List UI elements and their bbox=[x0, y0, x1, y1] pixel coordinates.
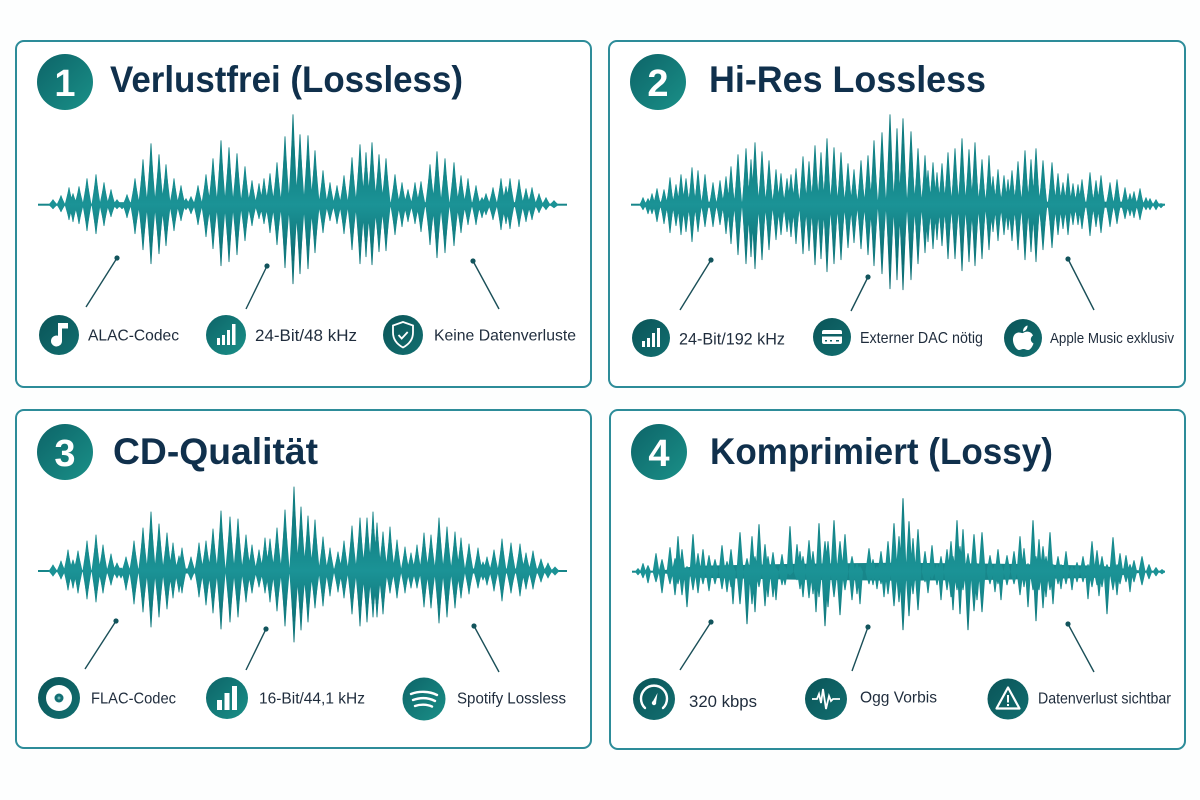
waveform 3 bbox=[38, 487, 567, 642]
icon: disc bbox=[38, 677, 80, 719]
label: Keine Datenverluste: Keine Datenverluste bbox=[434, 328, 576, 344]
panel: Verlustfrei (Lossless) bbox=[16, 41, 591, 387]
label: 16-Bit/44,1 kHz: 16-Bit/44,1 kHz bbox=[259, 690, 365, 708]
callout leader: Ogg Vorbis bbox=[852, 624, 871, 671]
label: Externer DAC nötig: Externer DAC nötig bbox=[860, 330, 983, 347]
label: 320 kbps: 320 kbps bbox=[689, 692, 757, 711]
callout leader: 16-Bit/44,1 kHz bbox=[246, 626, 269, 670]
number badge 1 bbox=[37, 54, 93, 110]
heading 3: CD-Qualität bbox=[113, 431, 318, 472]
waveform 1 bbox=[38, 115, 567, 284]
callout leader: Apple Music bbox=[1065, 256, 1094, 310]
number badge 3: 3 bbox=[54, 433, 76, 475]
icon: music note bbox=[39, 315, 79, 355]
icon: external DAC bbox=[813, 318, 851, 356]
label: 24-Bit/48 kHz: 24-Bit/48 kHz bbox=[255, 326, 357, 345]
panel: Komprimiert (Lossy) bbox=[610, 410, 1185, 749]
icon: warning triangle bbox=[988, 678, 1028, 720]
number badge 1: 1 bbox=[54, 63, 76, 105]
number badge 2: 2 bbox=[647, 63, 669, 105]
number badge 4: 4 bbox=[648, 433, 670, 475]
label: Spotify Lossless: Spotify Lossless bbox=[457, 690, 566, 708]
label: ALAC-Codec: ALAC-Codec bbox=[88, 328, 179, 344]
icon: signal bars bbox=[206, 677, 248, 719]
panel: Hi-Res Lossless bbox=[609, 41, 1185, 387]
heading 4: Komprimiert (Lossy) bbox=[710, 431, 1053, 472]
icon: shield check bbox=[383, 315, 423, 355]
heading 2: Hi-Res Lossless bbox=[709, 59, 986, 100]
icon: apple bbox=[1004, 319, 1042, 357]
number badge 2 bbox=[630, 54, 686, 110]
card frame 3 bbox=[16, 410, 591, 748]
icon: signal bars bbox=[206, 315, 246, 355]
icon: spotify waves bbox=[402, 678, 446, 720]
panel: CD-Qualität bbox=[16, 410, 591, 748]
label: Datenverlust sichtbar: Datenverlust sichtbar bbox=[1038, 690, 1172, 708]
heading 1: Verlustfrei (Lossless) bbox=[110, 59, 463, 100]
callout leader: Datenverlust sichtbar bbox=[1065, 621, 1094, 672]
label: FLAC-Codec: FLAC-Codec bbox=[91, 690, 176, 708]
number badge 3 bbox=[37, 424, 93, 480]
label: Ogg Vorbis: Ogg Vorbis bbox=[860, 690, 937, 706]
callout leader: Keine Datenverluste bbox=[470, 258, 499, 309]
callout leader: 24-Bit/48 kHz bbox=[246, 263, 270, 309]
label: 24-Bit/192 kHz: 24-Bit/192 kHz bbox=[679, 330, 785, 348]
icon: pulse wave bbox=[805, 678, 847, 720]
card frame 2 bbox=[609, 41, 1185, 387]
waveform 4 bbox=[632, 499, 1165, 630]
callout leader: FLAC-Codec bbox=[85, 618, 119, 669]
icon: speedometer bbox=[633, 678, 675, 720]
callout leader: 320 kbps bbox=[680, 619, 714, 670]
callout leader: 24-Bit/192 kHz bbox=[680, 257, 714, 310]
number badge 4 bbox=[631, 424, 687, 480]
callout leader: ALAC-Codec bbox=[86, 255, 120, 307]
card frame 1 bbox=[16, 41, 591, 387]
card frame 4 bbox=[610, 410, 1185, 749]
waveform 2 bbox=[631, 115, 1165, 290]
callout leader: Externer DAC bbox=[851, 274, 871, 311]
callout leader: Spotify Lossless bbox=[471, 623, 499, 672]
icon: signal bars bbox=[632, 319, 670, 357]
label: Apple Music exklusiv: Apple Music exklusiv bbox=[1050, 330, 1174, 347]
